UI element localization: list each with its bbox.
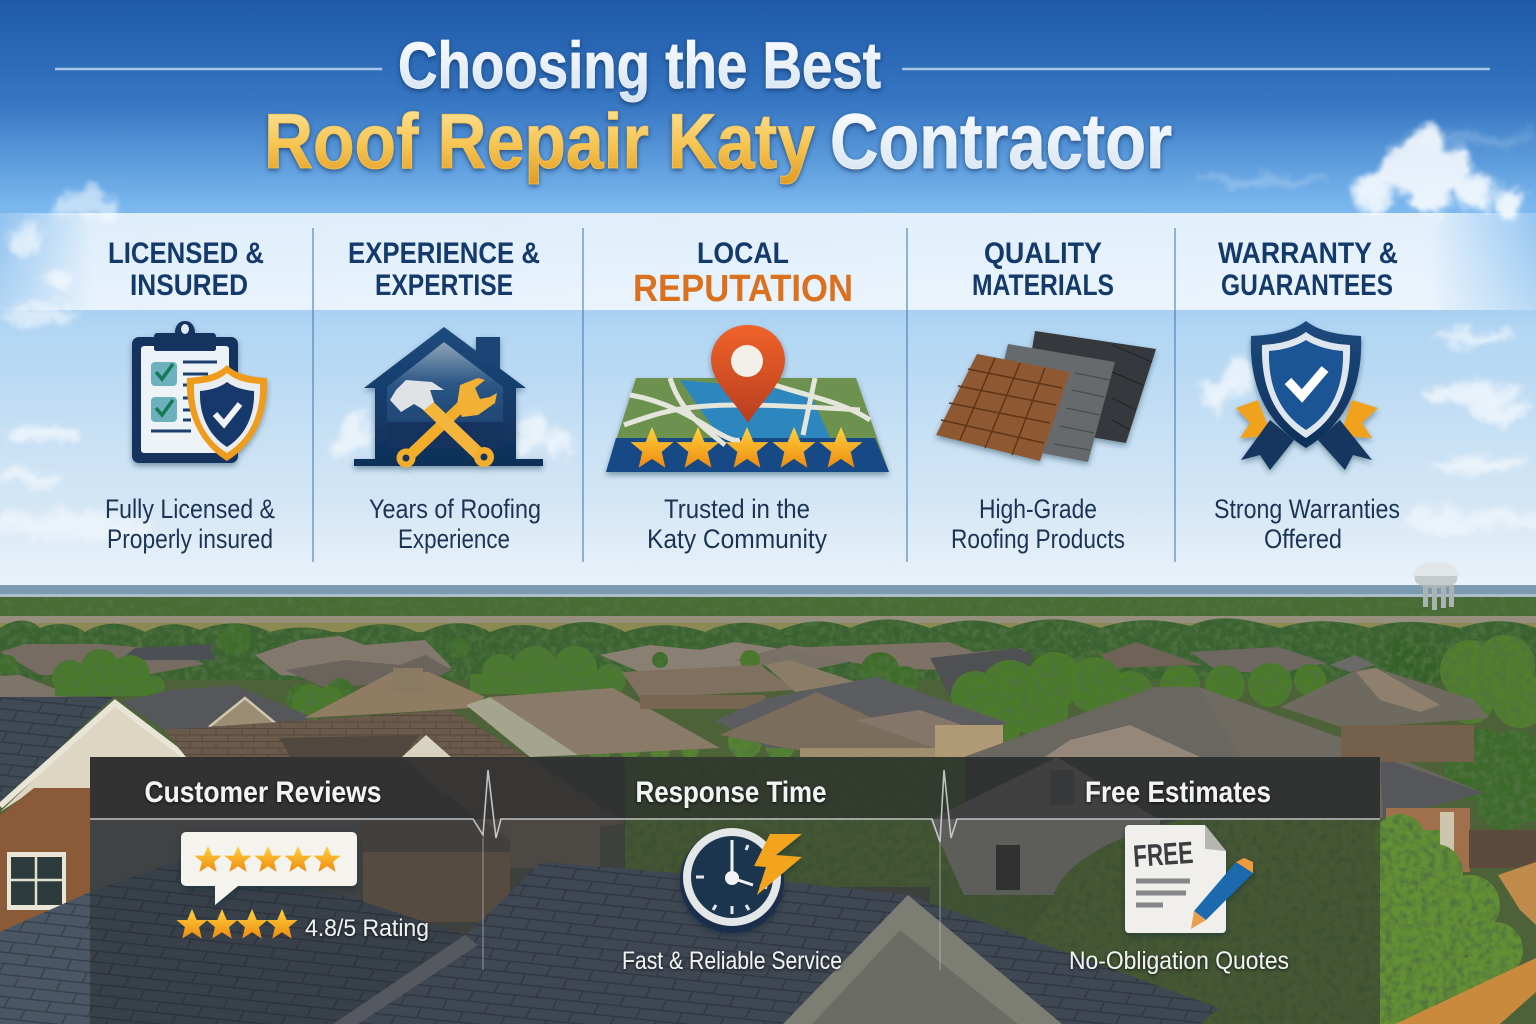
- text block: Fully Licensed &: [105, 494, 275, 524]
- text block: [1214, 494, 1400, 554]
- title: Choosing the Best: [398, 28, 881, 102]
- rating text: 4.8/5 Rating: [305, 915, 429, 942]
- left foreground house: [0, 697, 113, 805]
- heading: [108, 237, 264, 302]
- heading: Response Time: [636, 776, 826, 809]
- foreground slate roofs: [0, 860, 465, 1024]
- rating stars: [176, 909, 298, 939]
- icon: speech bubble with stars: [181, 832, 357, 905]
- icon: roofing shingle samples: [936, 331, 1156, 462]
- icon: free quote document with pencil: FREE: [1132, 835, 1194, 874]
- heading: [633, 237, 853, 310]
- text block: Experience: [398, 524, 510, 554]
- heading: MATERIALS: [972, 269, 1114, 302]
- icon: map pin with five stars: [606, 325, 889, 472]
- text block: [951, 494, 1125, 554]
- mid trees: [0, 624, 1536, 830]
- text block: Offered: [1264, 524, 1342, 554]
- water tower: [1413, 562, 1459, 610]
- heading: [1218, 237, 1398, 302]
- heading: [348, 237, 540, 302]
- text block: [647, 494, 827, 554]
- heading: LOCAL: [697, 237, 789, 270]
- icon: free quote document with pencil: [1125, 825, 1253, 933]
- title: [55, 28, 1490, 185]
- right house: [1280, 668, 1489, 728]
- background sky: [0, 0, 1536, 600]
- heading: LICENSED &: [108, 237, 264, 270]
- section: response time: [622, 776, 842, 975]
- mid-ground roofs: [122, 685, 314, 730]
- heading: WARRANTY &: [1218, 237, 1398, 270]
- section: customer reviews: [144, 776, 429, 942]
- column: experience and expertise: [348, 237, 543, 554]
- distant tree line: [0, 618, 1536, 680]
- heading: REPUTATION: [633, 268, 853, 310]
- text block: Properly insured: [107, 524, 273, 554]
- column: quality materials: [936, 237, 1156, 554]
- panel: criteria columns: [0, 213, 1536, 585]
- heading: GUARANTEES: [1221, 269, 1393, 302]
- under-panel structures: [90, 757, 1380, 1024]
- landscape: neighbourhood roofs and trees: [0, 562, 1536, 1024]
- heading: [972, 237, 1114, 302]
- heading: EXPERIENCE &: [348, 237, 540, 270]
- caption: Fast & Reliable Service: [622, 947, 842, 975]
- caption: No-Obligation Quotes: [1069, 947, 1289, 975]
- text block: Years of Roofing: [369, 494, 541, 524]
- icon: clock with lightning bolt: [680, 828, 802, 933]
- text block: [369, 494, 541, 554]
- heading: Customer Reviews: [144, 776, 382, 809]
- heading: QUALITY: [984, 237, 1102, 270]
- column: warranty and guarantees: [1214, 237, 1400, 554]
- panel: bottom strip: [90, 757, 1380, 1024]
- text block: Strong Warranties: [1214, 494, 1400, 524]
- column: local reputation: [606, 237, 889, 554]
- heading: Free Estimates: [1085, 776, 1271, 809]
- icon: clipboard with shield: [132, 321, 267, 463]
- far roofs: [0, 636, 1375, 700]
- text block: High-Grade: [979, 494, 1097, 524]
- title: Roof Repair Katy: [264, 97, 815, 185]
- title: Contractor: [830, 97, 1172, 185]
- text block: Trusted in the: [664, 494, 810, 524]
- text block: [105, 494, 275, 554]
- text block: Roofing Products: [951, 524, 1125, 554]
- column: licensed and insured: [105, 237, 275, 554]
- section: free estimates: [1069, 776, 1289, 975]
- big right roof: [964, 687, 1484, 818]
- icon: house with hammer and wrench: [354, 327, 543, 468]
- icon: shield with ribbon: [1236, 321, 1378, 470]
- text block: Katy Community: [647, 524, 827, 554]
- heading: INSURED: [130, 269, 248, 302]
- heading: EXPERTISE: [375, 269, 513, 302]
